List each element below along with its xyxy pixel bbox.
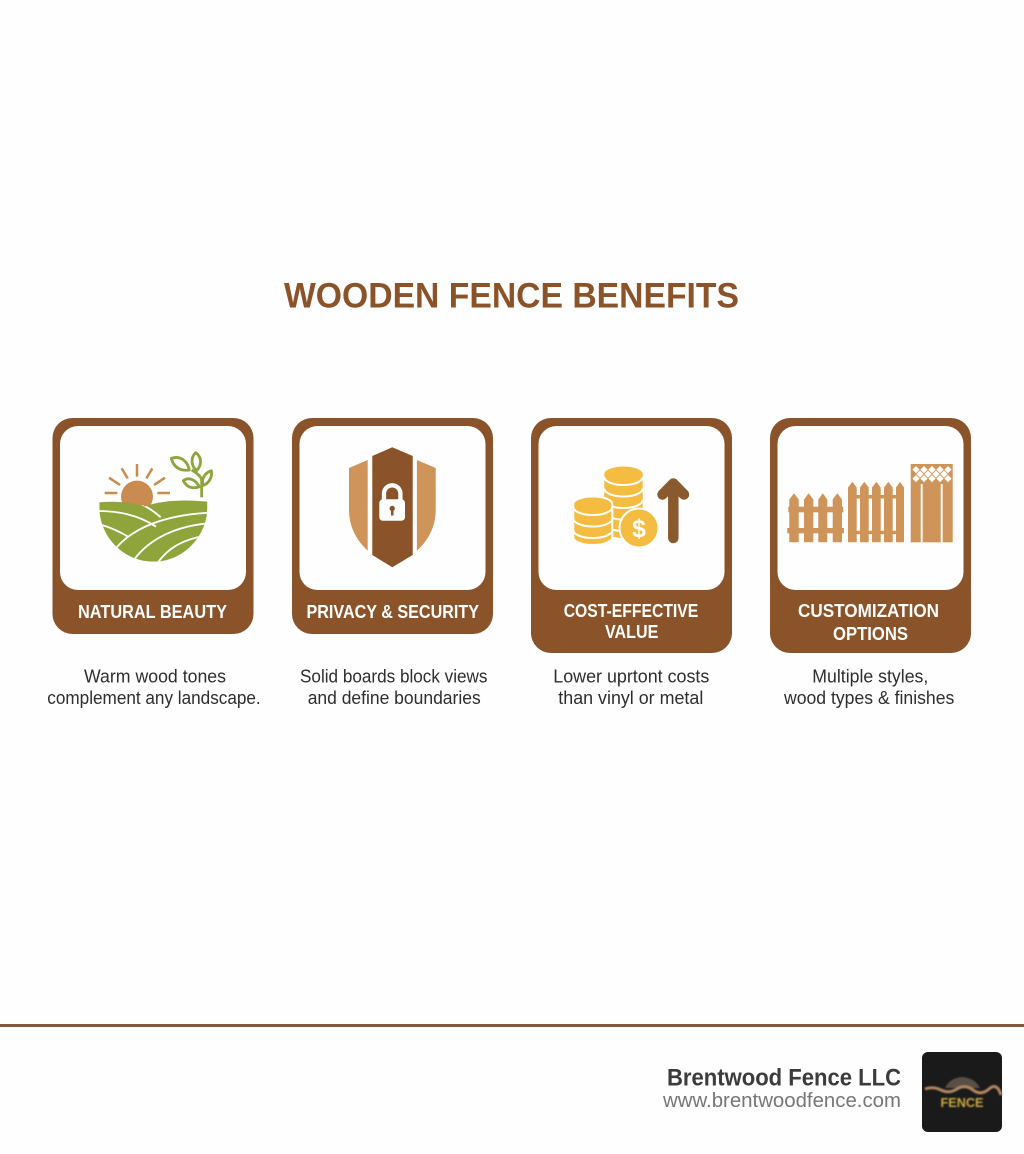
fence: privacy with lattice top xyxy=(911,464,953,542)
title: WOODEN FENCE BENEFITS xyxy=(284,276,739,316)
label: privacy and security: PRIVACY & SECURITY xyxy=(306,602,479,622)
footer company name: Brentwood Fence LLC xyxy=(667,1064,901,1092)
description: privacy and security: Solid boards block views xyxy=(300,666,488,686)
infographic canvas xyxy=(0,282,1024,1132)
description: natural beauty: Warm wood tones xyxy=(84,666,226,686)
icon: coin stacks with rising arrow: $ xyxy=(632,515,646,543)
description: privacy and security: and define boundaries xyxy=(308,688,481,708)
description: customization options: Multiple styles, xyxy=(812,666,928,686)
panel: customization options xyxy=(770,418,971,708)
panel: privacy and security xyxy=(292,418,493,708)
description: cost-effective value: than vinyl or metal xyxy=(558,688,703,708)
label: customization options: OPTIONS xyxy=(833,624,908,644)
card frame: privacy and security xyxy=(292,418,493,634)
label: customization options: CUSTOMIZATION xyxy=(798,601,939,621)
icon: shield with padlock xyxy=(349,447,436,567)
fence: tall picket xyxy=(848,482,904,542)
icon: three fence styles xyxy=(787,464,953,542)
logo badge: FENCE xyxy=(940,1095,984,1110)
panel: natural beauty xyxy=(47,418,261,708)
panel: cost-effective value xyxy=(531,418,732,708)
footer divider xyxy=(0,1024,1024,1027)
fence: short picket xyxy=(787,493,844,542)
label: natural beauty: NATURAL BEAUTY xyxy=(78,602,227,622)
description: cost-effective value: Lower uprtont costs xyxy=(553,666,709,686)
card frame: cost-effective value xyxy=(531,418,732,653)
description: natural beauty: complement any landscape. xyxy=(47,688,261,708)
icon: sun over green fields with sprout xyxy=(97,453,212,563)
card frame: customization options xyxy=(770,418,971,653)
footer website: www.brentwoodfence.com xyxy=(662,1090,901,1112)
card frame: natural beauty xyxy=(52,418,254,634)
description: customization options: wood types & finishes xyxy=(783,688,954,708)
label: cost-effective value: COST-EFFECTIVE xyxy=(564,601,698,621)
logo badge xyxy=(922,1052,1002,1132)
icon: coin stacks with rising arrow xyxy=(573,466,684,548)
label: cost-effective value: VALUE xyxy=(605,622,658,642)
